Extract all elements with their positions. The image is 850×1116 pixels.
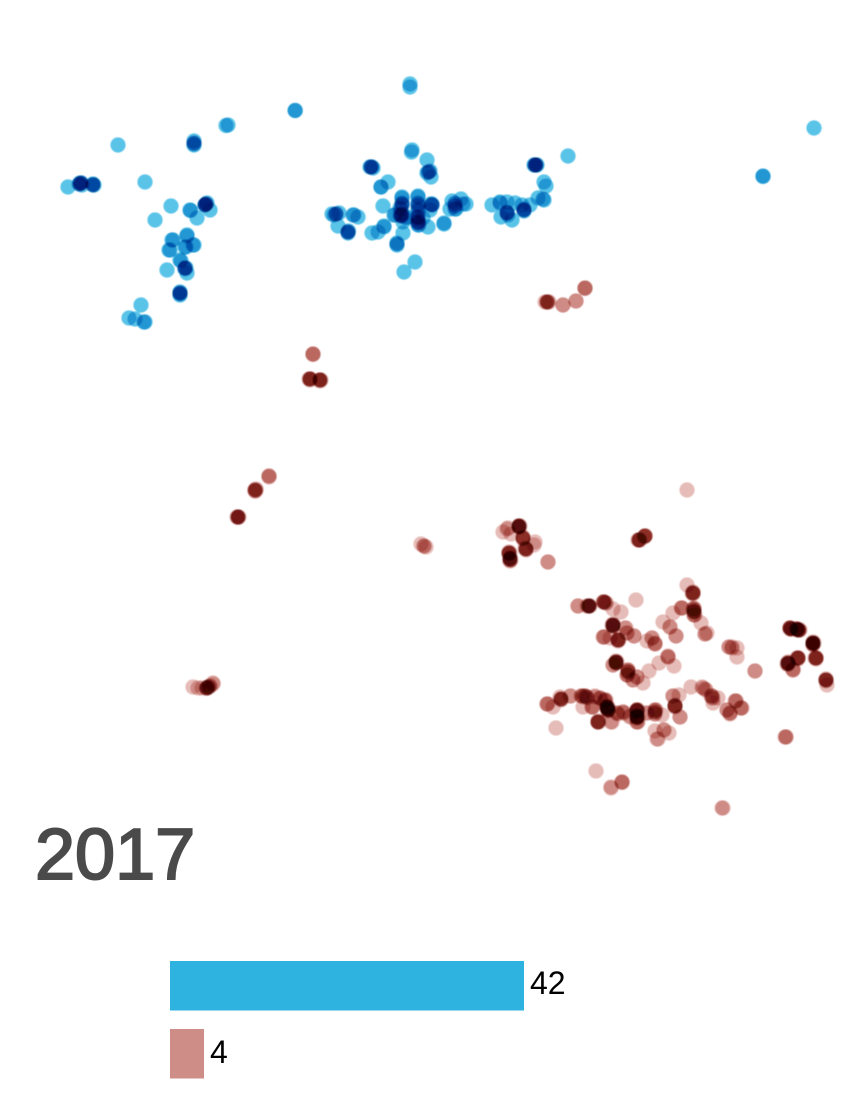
dot cluster: red points [185, 280, 835, 816]
bar: blue value [170, 961, 524, 1010]
label: 42: 42 [530, 965, 566, 1001]
year title: 2017 [35, 815, 195, 895]
bar: red value [170, 1029, 204, 1078]
label: 4: 4 [210, 1034, 228, 1070]
bar chart [170, 961, 566, 1078]
dot cluster: blue points [60, 76, 822, 330]
